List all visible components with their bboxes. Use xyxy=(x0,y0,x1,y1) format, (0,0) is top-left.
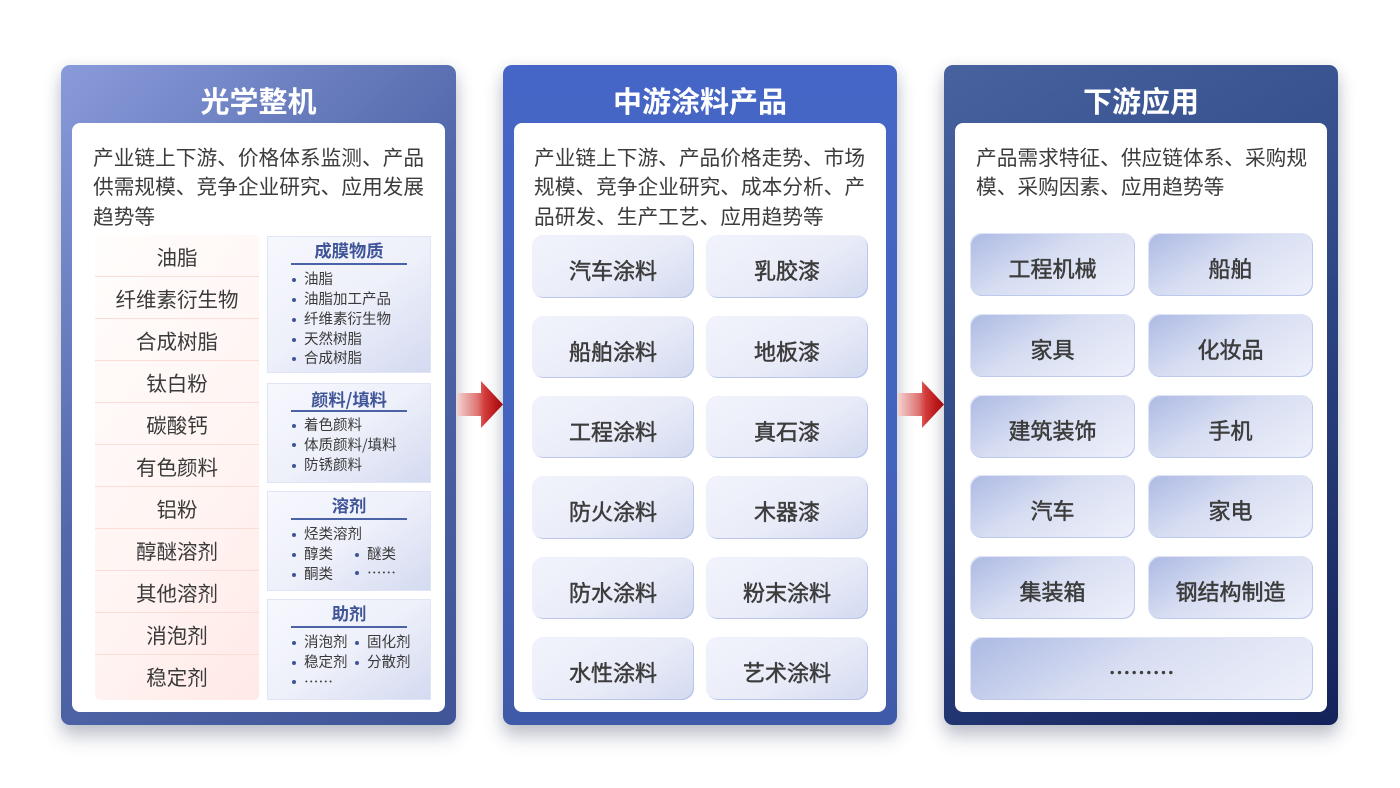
application grid: 手机 xyxy=(1208,419,1252,444)
box: 颜料/填料: 防锈颜料 xyxy=(304,458,362,474)
application grid: 汽车 xyxy=(1030,499,1074,524)
product grid: 真石漆 xyxy=(754,420,820,445)
product grid: 防水涂料 xyxy=(569,581,657,606)
box: 溶剂: …… xyxy=(367,562,396,583)
list: raw materials: 其他溶剂 xyxy=(136,583,218,606)
description text xyxy=(534,147,865,229)
box: 颜料/填料 xyxy=(267,383,431,483)
description text: 产品需求特征、供应链体系、采购规 xyxy=(976,147,1307,170)
box: 助剂: …… xyxy=(304,671,333,692)
application grid: 家具 xyxy=(1030,338,1074,363)
box: 成膜物质: 油脂加工产品 xyxy=(304,292,391,308)
box: 助剂: 稳定剂 xyxy=(304,655,348,671)
box: 助剂: 消泡剂 xyxy=(304,635,348,651)
product grid: 艺术涂料 xyxy=(743,661,831,686)
box: 溶剂 xyxy=(267,491,431,591)
box: 成膜物质: 成膜物质 xyxy=(314,241,384,261)
heading: 光学整机: 光学整机 xyxy=(200,87,316,119)
list: raw materials: 纤维素衍生物 xyxy=(116,289,238,312)
box: 助剂: 助剂 xyxy=(332,604,366,624)
application grid: 工程机械 xyxy=(1008,257,1096,282)
description text xyxy=(976,147,1307,199)
product grid: 乳胶漆 xyxy=(754,259,820,284)
product grid: 地板漆 xyxy=(754,340,820,365)
arrow: middle to downstream xyxy=(898,381,944,428)
description text: 供需规模、竞争企业研究、应用发展 xyxy=(93,176,424,199)
description text: 规模、竞争企业研究、成本分析、产 xyxy=(534,176,865,199)
description text: 模、采购因素、应用趋势等 xyxy=(976,176,1224,199)
product grid: 水性涂料 xyxy=(569,661,657,686)
product grid xyxy=(532,235,868,700)
product grid: 工程涂料 xyxy=(569,420,657,445)
panel body: 中游涂料产品 xyxy=(514,123,886,712)
application grid: 船舶 xyxy=(1208,257,1252,282)
box: 颜料/填料: 颜料/填料 xyxy=(311,386,387,411)
box: 溶剂: 醇类 xyxy=(304,547,333,563)
box: 成膜物质 xyxy=(267,236,431,373)
box: 颜料/填料: 体质颜料/填料 xyxy=(304,434,397,455)
box: 成膜物质: 合成树脂 xyxy=(304,351,362,367)
application grid: 建筑装饰 xyxy=(1008,419,1096,444)
box: 溶剂: 酮类 xyxy=(304,567,333,583)
panel: 中游涂料产品 xyxy=(503,65,897,725)
list: raw materials: 稳定剂 xyxy=(146,667,208,690)
description text: 趋势等 xyxy=(93,206,155,229)
heading: 下游应用: 下游应用 xyxy=(1083,87,1199,119)
panel body: 下游应用 xyxy=(955,123,1327,712)
panel: 光学整机 xyxy=(61,65,456,725)
box: 溶剂: 醚类 xyxy=(367,547,396,563)
panel body: 光学整机 xyxy=(72,123,445,712)
product grid: 木器漆 xyxy=(754,500,820,525)
box: 成膜物质: 油脂 xyxy=(304,272,333,288)
list: raw materials: 碳酸钙 xyxy=(146,415,208,438)
box: 颜料/填料: 着色颜料 xyxy=(304,418,362,434)
product grid: 粉末涂料 xyxy=(743,581,831,606)
product grid: 船舶涂料 xyxy=(569,340,657,365)
product grid: 防火涂料 xyxy=(569,500,657,525)
box: 成膜物质: 天然树脂 xyxy=(304,332,362,348)
list: raw materials: 消泡剂 xyxy=(146,625,208,648)
list: raw materials: 醇醚溶剂 xyxy=(136,541,218,564)
application grid: 钢结构制造 xyxy=(1175,580,1286,605)
description text: 产业链上下游、价格体系监测、产品 xyxy=(93,147,424,170)
panel: 下游应用 xyxy=(944,65,1338,725)
application grid xyxy=(970,233,1313,700)
list: raw materials: 有色颜料 xyxy=(136,457,218,480)
product grid: 汽车涂料 xyxy=(569,259,657,284)
list: raw materials: 钛白粉 xyxy=(146,373,208,396)
description text: 品研发、生产工艺、应用趋势等 xyxy=(534,206,824,229)
list: raw materials: 铝粉 xyxy=(156,499,198,522)
heading: 中游涂料产品: 中游涂料产品 xyxy=(613,87,787,119)
box: 溶剂: 溶剂 xyxy=(332,496,366,516)
list: raw materials: 油脂 xyxy=(156,247,198,270)
box: 助剂: 固化剂 xyxy=(367,635,410,651)
description text xyxy=(93,147,424,229)
description text: 产业链上下游、产品价格走势、市场 xyxy=(534,147,865,170)
list: raw materials: 合成树脂 xyxy=(136,331,218,354)
application grid: ……… xyxy=(1108,656,1174,688)
list: raw materials xyxy=(95,235,259,700)
box: 溶剂: 烃类溶剂 xyxy=(304,527,362,543)
application grid: 家电 xyxy=(1208,499,1252,524)
application grid: 集装箱 xyxy=(1019,580,1086,605)
box: 助剂 xyxy=(267,599,431,700)
arrow: first to middle xyxy=(457,381,503,428)
application grid: 化妆品 xyxy=(1197,338,1264,363)
box: 助剂: 分散剂 xyxy=(367,655,410,671)
box: 成膜物质: 纤维素衍生物 xyxy=(304,312,391,328)
